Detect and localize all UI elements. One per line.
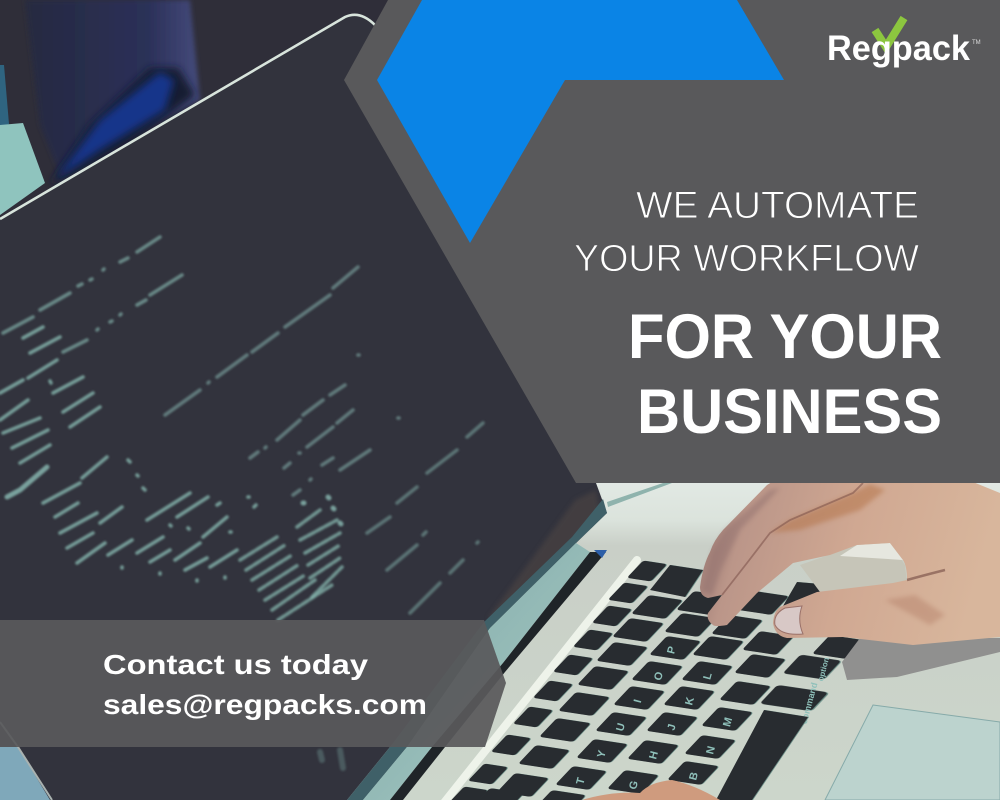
laptop lid edge highlight [0, 15, 375, 219]
contact email: sales@regpacks.com [103, 689, 427, 720]
home row key labels: H [647, 750, 661, 761]
headline line: we automate: WE AUTOMATE [636, 185, 919, 227]
home row key labels [627, 671, 715, 791]
qwerty key labels: P [665, 645, 679, 655]
thumb web crease [907, 570, 945, 580]
upper right keys [676, 582, 864, 659]
option key: option [816, 656, 831, 682]
qwerty key labels [574, 645, 679, 786]
qwerty key labels: T [574, 776, 588, 786]
index finger shading [702, 488, 780, 596]
headline [574, 185, 942, 447]
qwerty key labels: U [614, 722, 628, 733]
contact panel background [0, 620, 506, 747]
laptop screen [0, 14, 607, 800]
home row key labels: L [701, 671, 715, 681]
qwerty key labels: I [632, 698, 644, 704]
hand shadow on laptop [842, 638, 1000, 680]
contact panel [0, 620, 506, 747]
keyboard well rim [443, 560, 637, 800]
bezel reflection [488, 490, 600, 620]
qwerty row keys [534, 613, 716, 800]
thumb knuckle tint [885, 595, 945, 625]
option key [783, 655, 841, 682]
hand typing [700, 482, 1000, 645]
contact heading: Contact us today [103, 649, 368, 680]
grey header panel [344, 0, 1000, 483]
bottom row key labels: M [721, 716, 735, 728]
trackpad [825, 705, 1000, 800]
space bar [716, 710, 808, 800]
bottom row key labels: N [704, 745, 718, 756]
headline line: business: BUSINESS [637, 377, 942, 447]
logo wordmark: Regpack [827, 29, 971, 68]
second hand fingertip at bottom [582, 780, 720, 800]
command key: command [799, 681, 819, 725]
headline line: for your: FOR YOUR [628, 302, 942, 372]
laptop hinge strips [347, 499, 607, 800]
logo: Regpack [827, 18, 981, 68]
logo trademark: TM [972, 40, 981, 46]
finger crease [722, 483, 863, 595]
bottom row keys [667, 615, 786, 785]
knuckle tint [770, 484, 885, 533]
bottom row key labels [687, 716, 735, 782]
number row keys [472, 595, 683, 800]
palm shadow between fingers [800, 543, 907, 592]
blue arrow shape [377, 0, 784, 243]
delete key [650, 565, 703, 597]
home row key labels: G [627, 780, 641, 791]
keyboard keys [448, 561, 864, 800]
qwerty key labels: O [652, 670, 666, 682]
small device corner bottom left [0, 722, 52, 800]
command key [760, 681, 828, 725]
home row key labels: J [666, 723, 679, 732]
home row keys [607, 636, 744, 794]
bottom row key labels: B [687, 771, 701, 782]
qwerty key labels: Y [595, 748, 609, 759]
deck reflection line [607, 483, 672, 507]
headline line: your workflow: YOUR WORKFLOW [574, 238, 919, 280]
logo checkmark [875, 18, 904, 47]
function column keys [448, 561, 667, 800]
thumb nail [775, 606, 803, 634]
laptop deck [345, 482, 1000, 800]
blurred code on screen [0, 237, 483, 768]
home row key labels: K [683, 696, 697, 707]
